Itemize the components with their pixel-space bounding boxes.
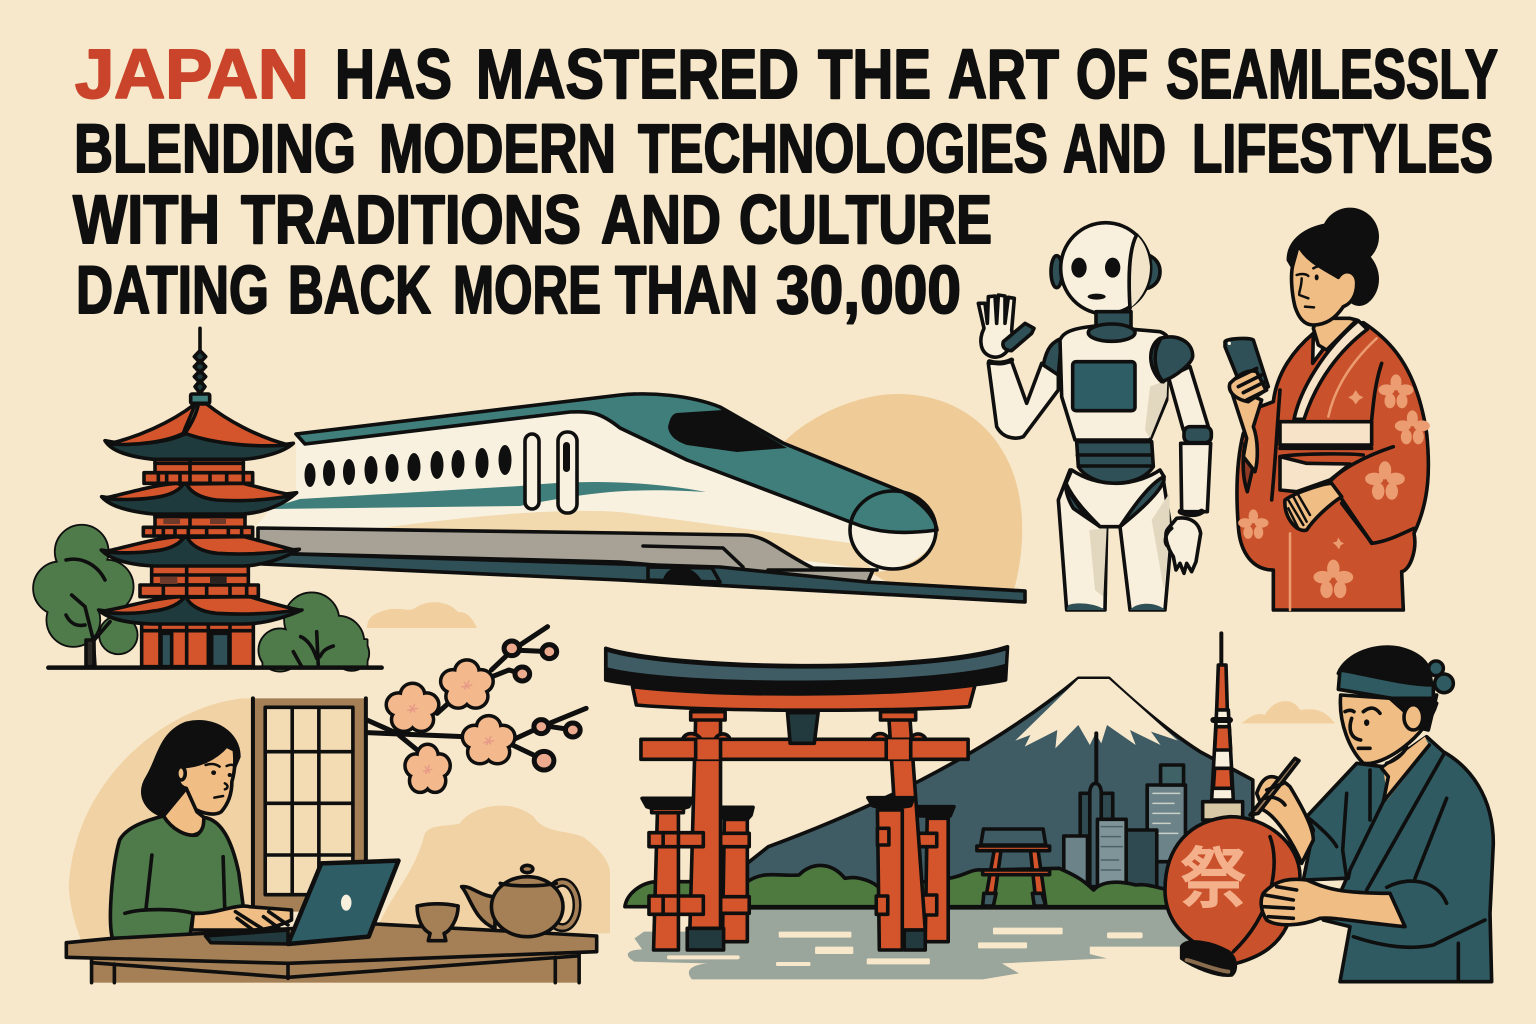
wheels bbox=[648, 567, 720, 582]
peach backdrop bbox=[69, 698, 253, 940]
table top bbox=[66, 924, 597, 963]
green hills bbox=[625, 865, 1170, 907]
woman head bbox=[1288, 208, 1379, 350]
water bbox=[628, 908, 1253, 979]
shoji window bbox=[253, 698, 366, 913]
robot neck bbox=[1096, 312, 1131, 328]
windshield bbox=[668, 410, 787, 452]
peach cloud bbox=[1242, 701, 1335, 723]
title line 1: HAS bbox=[335, 35, 452, 113]
title line 2: AND bbox=[1063, 110, 1166, 187]
windows bbox=[304, 445, 512, 487]
stripe bbox=[1290, 338, 1377, 610]
upper arm bbox=[1257, 777, 1313, 863]
sleeve line bbox=[1330, 447, 1414, 543]
robot right hand bbox=[1166, 518, 1201, 573]
torii scene bbox=[606, 647, 1253, 979]
train roof stripe bbox=[296, 394, 937, 532]
mount fuji bbox=[747, 678, 1253, 900]
sun behind train bbox=[783, 394, 1022, 590]
left main pillar bbox=[687, 712, 725, 950]
pagoda brick lines bbox=[142, 453, 253, 667]
woman face and neck bbox=[178, 746, 235, 814]
distant tower bbox=[1094, 733, 1098, 783]
title line 1: THE bbox=[818, 35, 931, 113]
nose bbox=[850, 491, 936, 569]
robot waist bbox=[1077, 442, 1153, 483]
pagoda tier bodies bbox=[140, 453, 258, 667]
craftsman, tower and lantern bbox=[1165, 633, 1493, 982]
title line 4: BACK bbox=[288, 252, 431, 328]
water reflections bbox=[667, 928, 1143, 966]
lower arm and hand bbox=[1261, 879, 1405, 927]
right back pillar bbox=[916, 807, 954, 942]
small shrine bbox=[977, 829, 1050, 906]
right tree bbox=[259, 593, 368, 671]
snow cap bbox=[1015, 679, 1178, 748]
doors bbox=[525, 434, 539, 509]
title line 1: JAPAN bbox=[75, 35, 309, 113]
lantern bbox=[1165, 817, 1300, 975]
peach cloud near pagoda bbox=[367, 602, 477, 628]
woman arm and phone bbox=[1225, 338, 1268, 472]
laptop bbox=[288, 861, 398, 944]
hand on keyboard bbox=[192, 906, 292, 930]
tokyo tower bbox=[1203, 633, 1243, 820]
torii lintel bbox=[633, 685, 975, 710]
pagoda doors bbox=[161, 633, 229, 667]
woman lower hand bbox=[1285, 483, 1342, 530]
title line 2 bbox=[74, 110, 1493, 187]
teacup bbox=[417, 904, 458, 941]
inner collar bbox=[1313, 328, 1323, 363]
robot collar bbox=[1088, 324, 1135, 341]
neck bbox=[1383, 737, 1429, 800]
torii plaque bbox=[787, 713, 818, 743]
title line 3: TRADITIONS bbox=[241, 181, 581, 258]
windows dark bbox=[160, 519, 227, 584]
blossoms bbox=[388, 685, 437, 730]
title line 3: WITH bbox=[73, 181, 220, 258]
robot right arm bbox=[1168, 367, 1208, 430]
robot pelvis bbox=[1066, 470, 1164, 527]
torii crossbeam bbox=[641, 734, 968, 759]
left tree bbox=[34, 526, 137, 667]
title line 4 bbox=[76, 252, 961, 328]
roof 3 bbox=[101, 537, 299, 566]
title line 4: DATING bbox=[76, 252, 269, 328]
collar bbox=[1294, 321, 1367, 419]
undercarriage bbox=[258, 528, 873, 584]
right front pillar bbox=[868, 798, 914, 950]
title line 1: OF bbox=[1076, 35, 1148, 113]
title line 4: THAN bbox=[615, 252, 758, 328]
robot legs bbox=[1058, 470, 1107, 610]
robot bbox=[978, 223, 1211, 610]
peach cloud bbox=[379, 806, 610, 933]
city buildings bbox=[1064, 765, 1185, 887]
woman at laptop scene bbox=[66, 627, 610, 983]
blossom branch bbox=[367, 627, 586, 791]
title line 1: ART bbox=[948, 35, 1059, 113]
body shading bbox=[380, 511, 873, 570]
craftsman body bbox=[1303, 737, 1493, 982]
laptop logo bbox=[341, 895, 351, 911]
title line 3 bbox=[73, 181, 992, 258]
buds bbox=[504, 641, 580, 770]
brush bbox=[1250, 758, 1299, 815]
title bbox=[73, 35, 1498, 328]
title line 1 bbox=[75, 35, 1498, 113]
left back pillar bbox=[721, 807, 753, 942]
title line 3: CULTURE bbox=[739, 181, 992, 258]
roof 1 bbox=[105, 404, 293, 459]
title line 1: MASTERED bbox=[476, 35, 799, 113]
table apron bbox=[92, 953, 579, 983]
spire bbox=[191, 328, 210, 403]
robot and woman in kimono bbox=[978, 208, 1430, 610]
table bbox=[66, 924, 597, 983]
left front pillar bbox=[642, 798, 703, 950]
ground line bbox=[48, 665, 382, 670]
title line 2: TECHNOLOGIES bbox=[638, 110, 1048, 187]
torii roof bbox=[606, 647, 1008, 692]
title line 2: BLENDING bbox=[74, 110, 356, 187]
lantern: 祭 bbox=[1180, 843, 1247, 917]
right main pillar bbox=[880, 712, 925, 950]
left sleeve detail bbox=[1272, 390, 1280, 500]
title line 3: AND bbox=[601, 181, 721, 258]
robot head bbox=[1051, 223, 1160, 314]
title line 2: MODERN bbox=[379, 110, 616, 187]
keyboard bbox=[206, 930, 288, 944]
kimono lines bbox=[1307, 745, 1485, 982]
roof 2 bbox=[102, 483, 297, 514]
obi bbox=[1280, 422, 1372, 445]
robot hand bbox=[978, 295, 1034, 363]
woman bbox=[1225, 208, 1430, 610]
kimono flowers bbox=[1238, 374, 1430, 598]
craftsman head bbox=[1338, 647, 1453, 764]
bullet train bbox=[253, 394, 1025, 602]
side stripe bbox=[270, 482, 706, 509]
robot screen bbox=[1073, 362, 1135, 411]
teapot bbox=[462, 865, 577, 937]
roof 4 bbox=[99, 597, 302, 624]
title line 4: MORE bbox=[453, 252, 601, 328]
pagoda and trees bbox=[34, 328, 382, 671]
kimono bbox=[1237, 323, 1428, 610]
robot torso bbox=[1060, 326, 1168, 440]
green sweater bbox=[110, 816, 244, 939]
title line 4: 30,000 bbox=[776, 252, 961, 328]
train cream body bbox=[253, 400, 937, 572]
robot left arm bbox=[988, 362, 1058, 438]
woman hair bbox=[143, 722, 239, 817]
